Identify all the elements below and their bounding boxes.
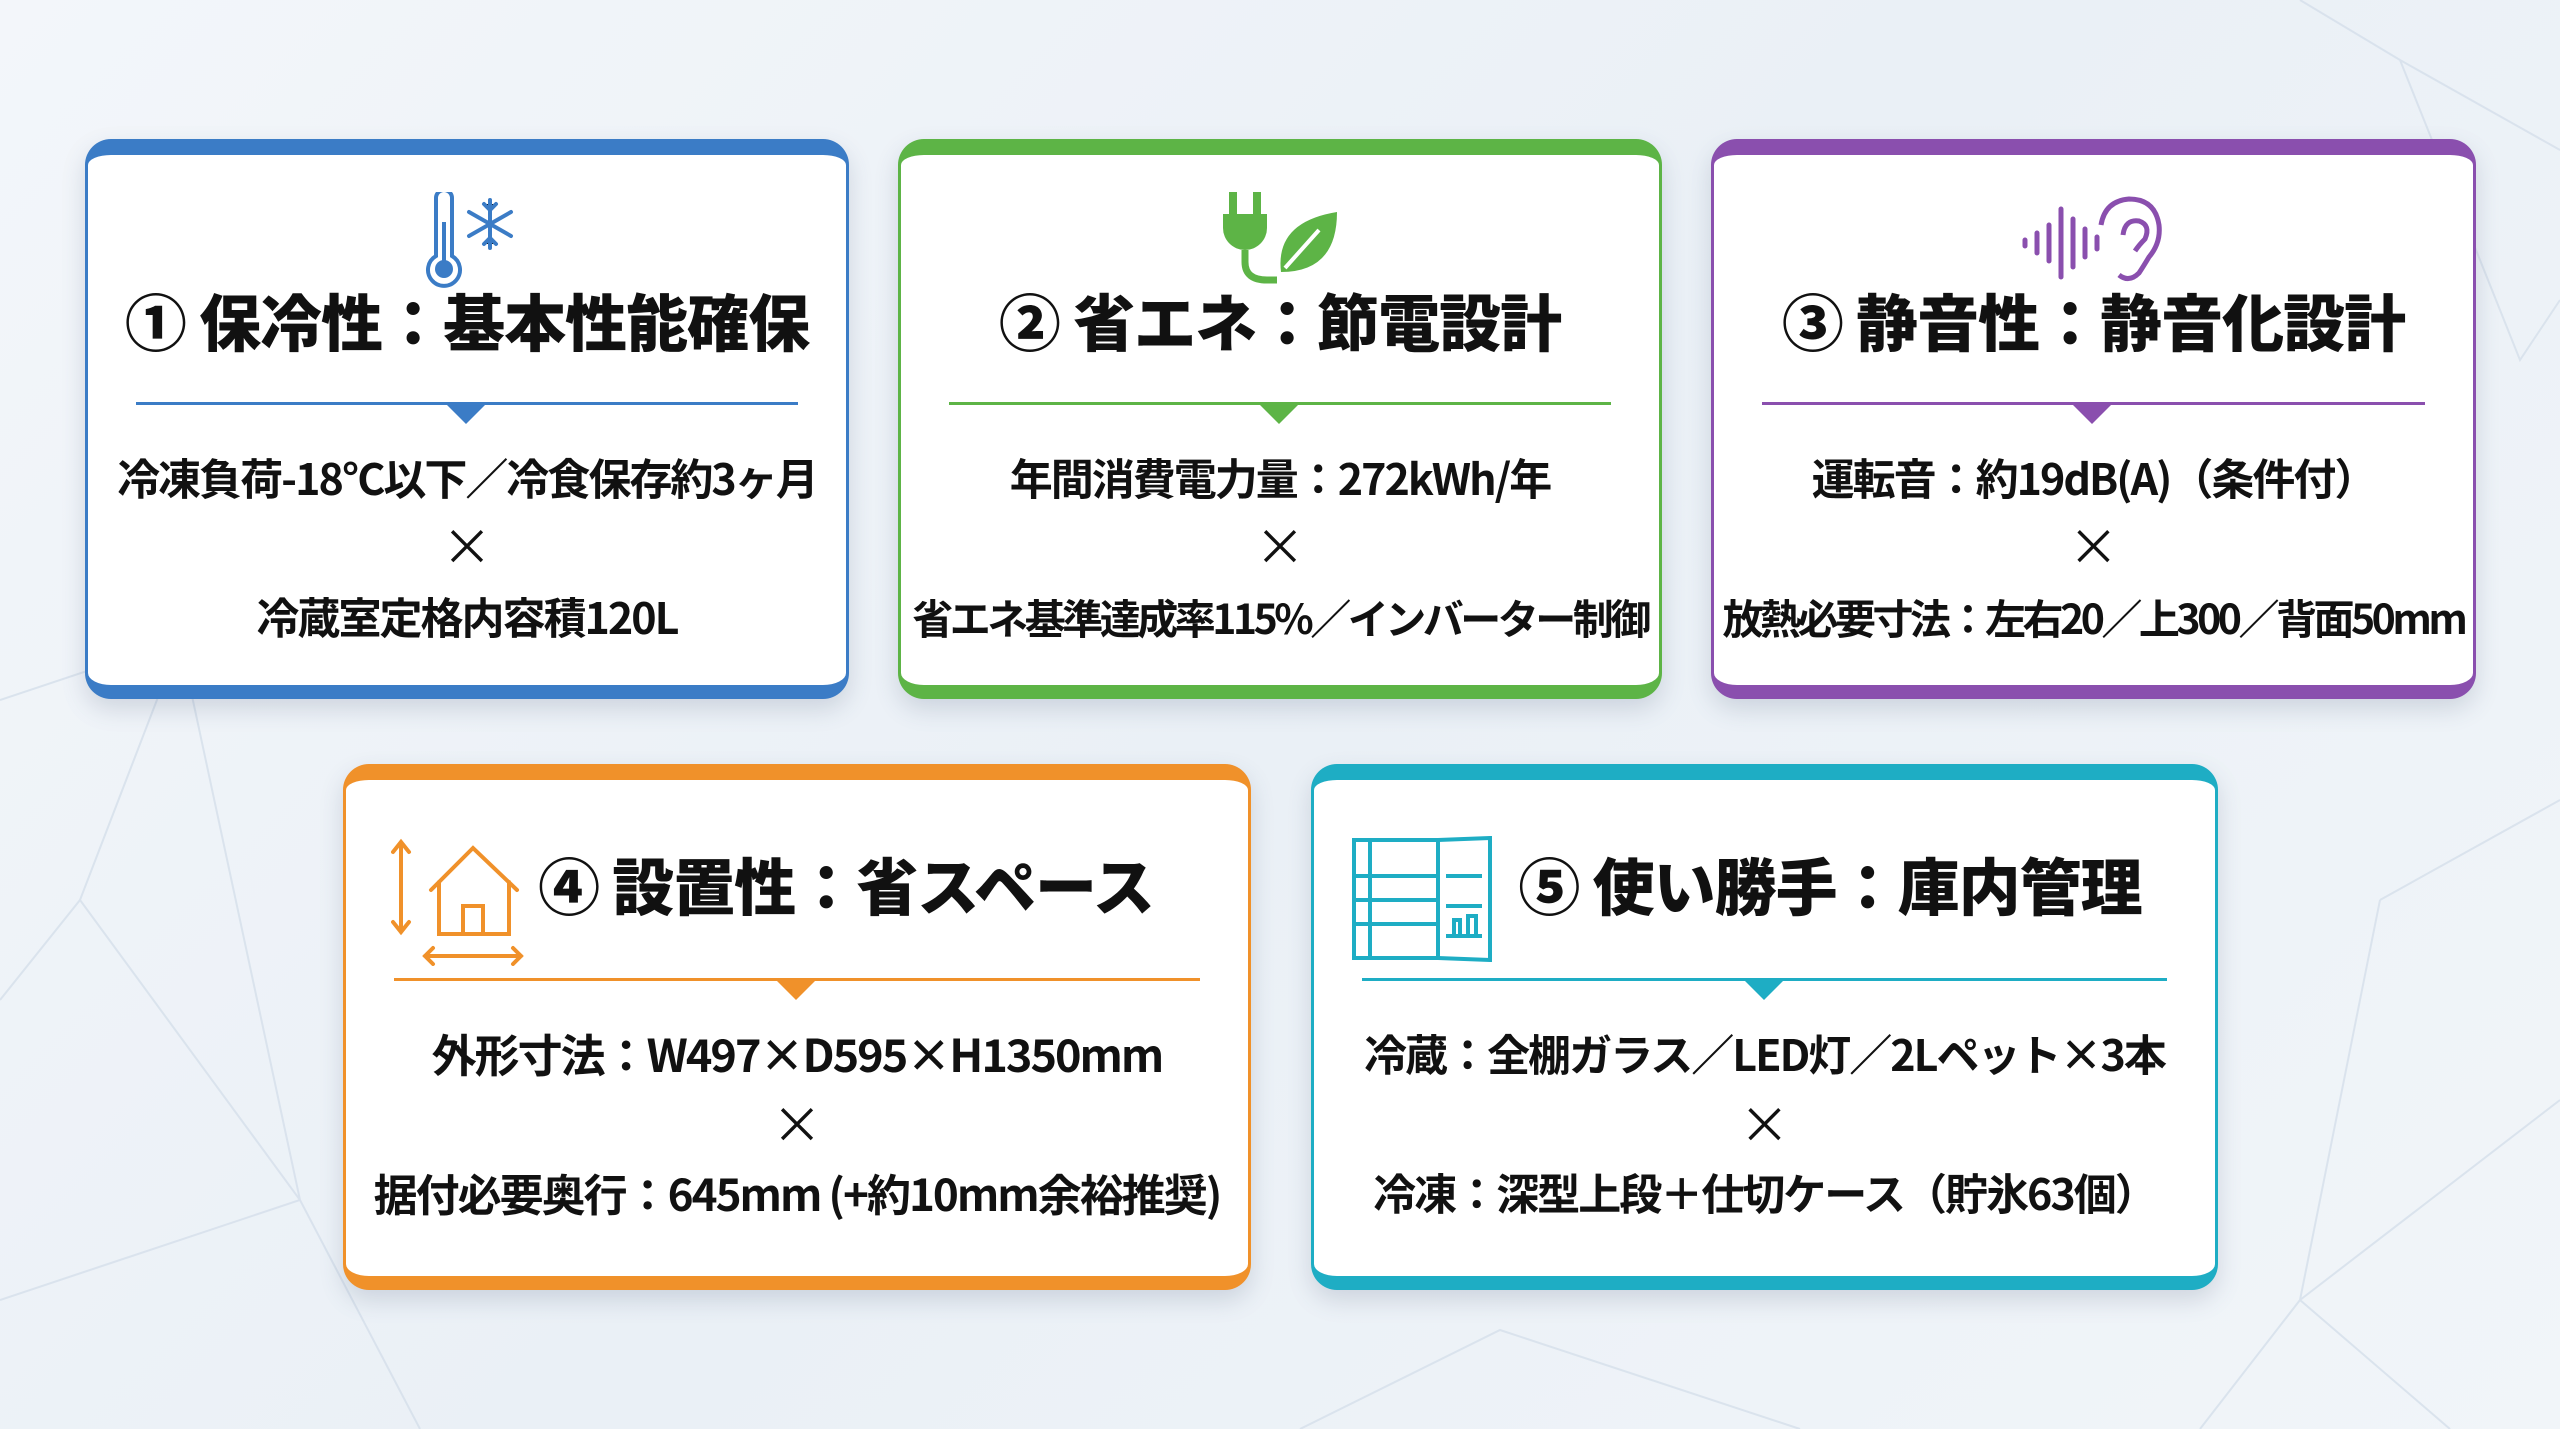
panel: 省エネ — [898, 139, 1662, 699]
panel: 使い勝手 — [1311, 764, 2218, 1290]
icon: open refrigerator — [1352, 836, 1492, 962]
panel: 静音性: 放熱必要寸法：左右20／上300／背面50mm — [1723, 586, 2464, 646]
text block: 年間消費電力量：272kWh/年 — [1010, 446, 1550, 508]
arrow — [1259, 404, 1299, 424]
panel: 省エネ: 省エネ基準達成率115%／インバーター制御 — [912, 586, 1648, 646]
panel: 保冷性: 冷蔵室定格内容積120L — [257, 585, 677, 647]
panel: 設置性: 据付必要奥行：645mm (+約10mm余裕推奨) — [374, 1160, 1220, 1224]
heading: ③ 静音性：静音化設計 — [1782, 274, 2405, 364]
text block: 冷凍負荷-18°C以下／冷食保存約3ヶ月 — [117, 446, 817, 508]
arrow — [2072, 404, 2112, 424]
heading: ⑤ 使い勝手：庫内管理 — [1518, 838, 2142, 928]
panel: 省エネ: × — [1255, 508, 1305, 580]
panel: 使い勝手: × — [1740, 1086, 1790, 1158]
icon: thermometer and snowflake — [426, 192, 514, 288]
panel: 使い勝手: 冷凍：深型上段＋仕切ケース（貯氷63個） — [1373, 1161, 2156, 1223]
icon: plug and leaf — [1223, 192, 1337, 284]
heading: ① 保冷性：基本性能確保 — [125, 274, 809, 364]
panel: 設置性 — [343, 764, 1251, 1290]
panel: 静音性 — [1711, 139, 2476, 699]
arrow — [446, 404, 486, 424]
panel: 設置性: × — [772, 1086, 822, 1158]
heading: ② 省エネ：節電設計 — [999, 274, 1561, 364]
text block: 外形寸法：W497×D595×H1350mm — [432, 1020, 1162, 1085]
panel: 保冷性: × — [442, 508, 492, 580]
icon: house with dimension arrows — [391, 838, 524, 966]
arrow — [1744, 980, 1784, 1000]
panel: 静音性: × — [2068, 508, 2118, 580]
icon: sound wave and ear — [2022, 196, 2162, 282]
arrow — [776, 980, 816, 1000]
panel: 保冷性 — [85, 139, 849, 699]
text block: 運転音：約19dB(A)（条件付） — [1812, 446, 2375, 508]
text block: 冷蔵：全棚ガラス／LED灯／2Lペット×3本 — [1364, 1022, 2165, 1084]
heading: ④ 設置性：省スペース — [538, 838, 1154, 928]
